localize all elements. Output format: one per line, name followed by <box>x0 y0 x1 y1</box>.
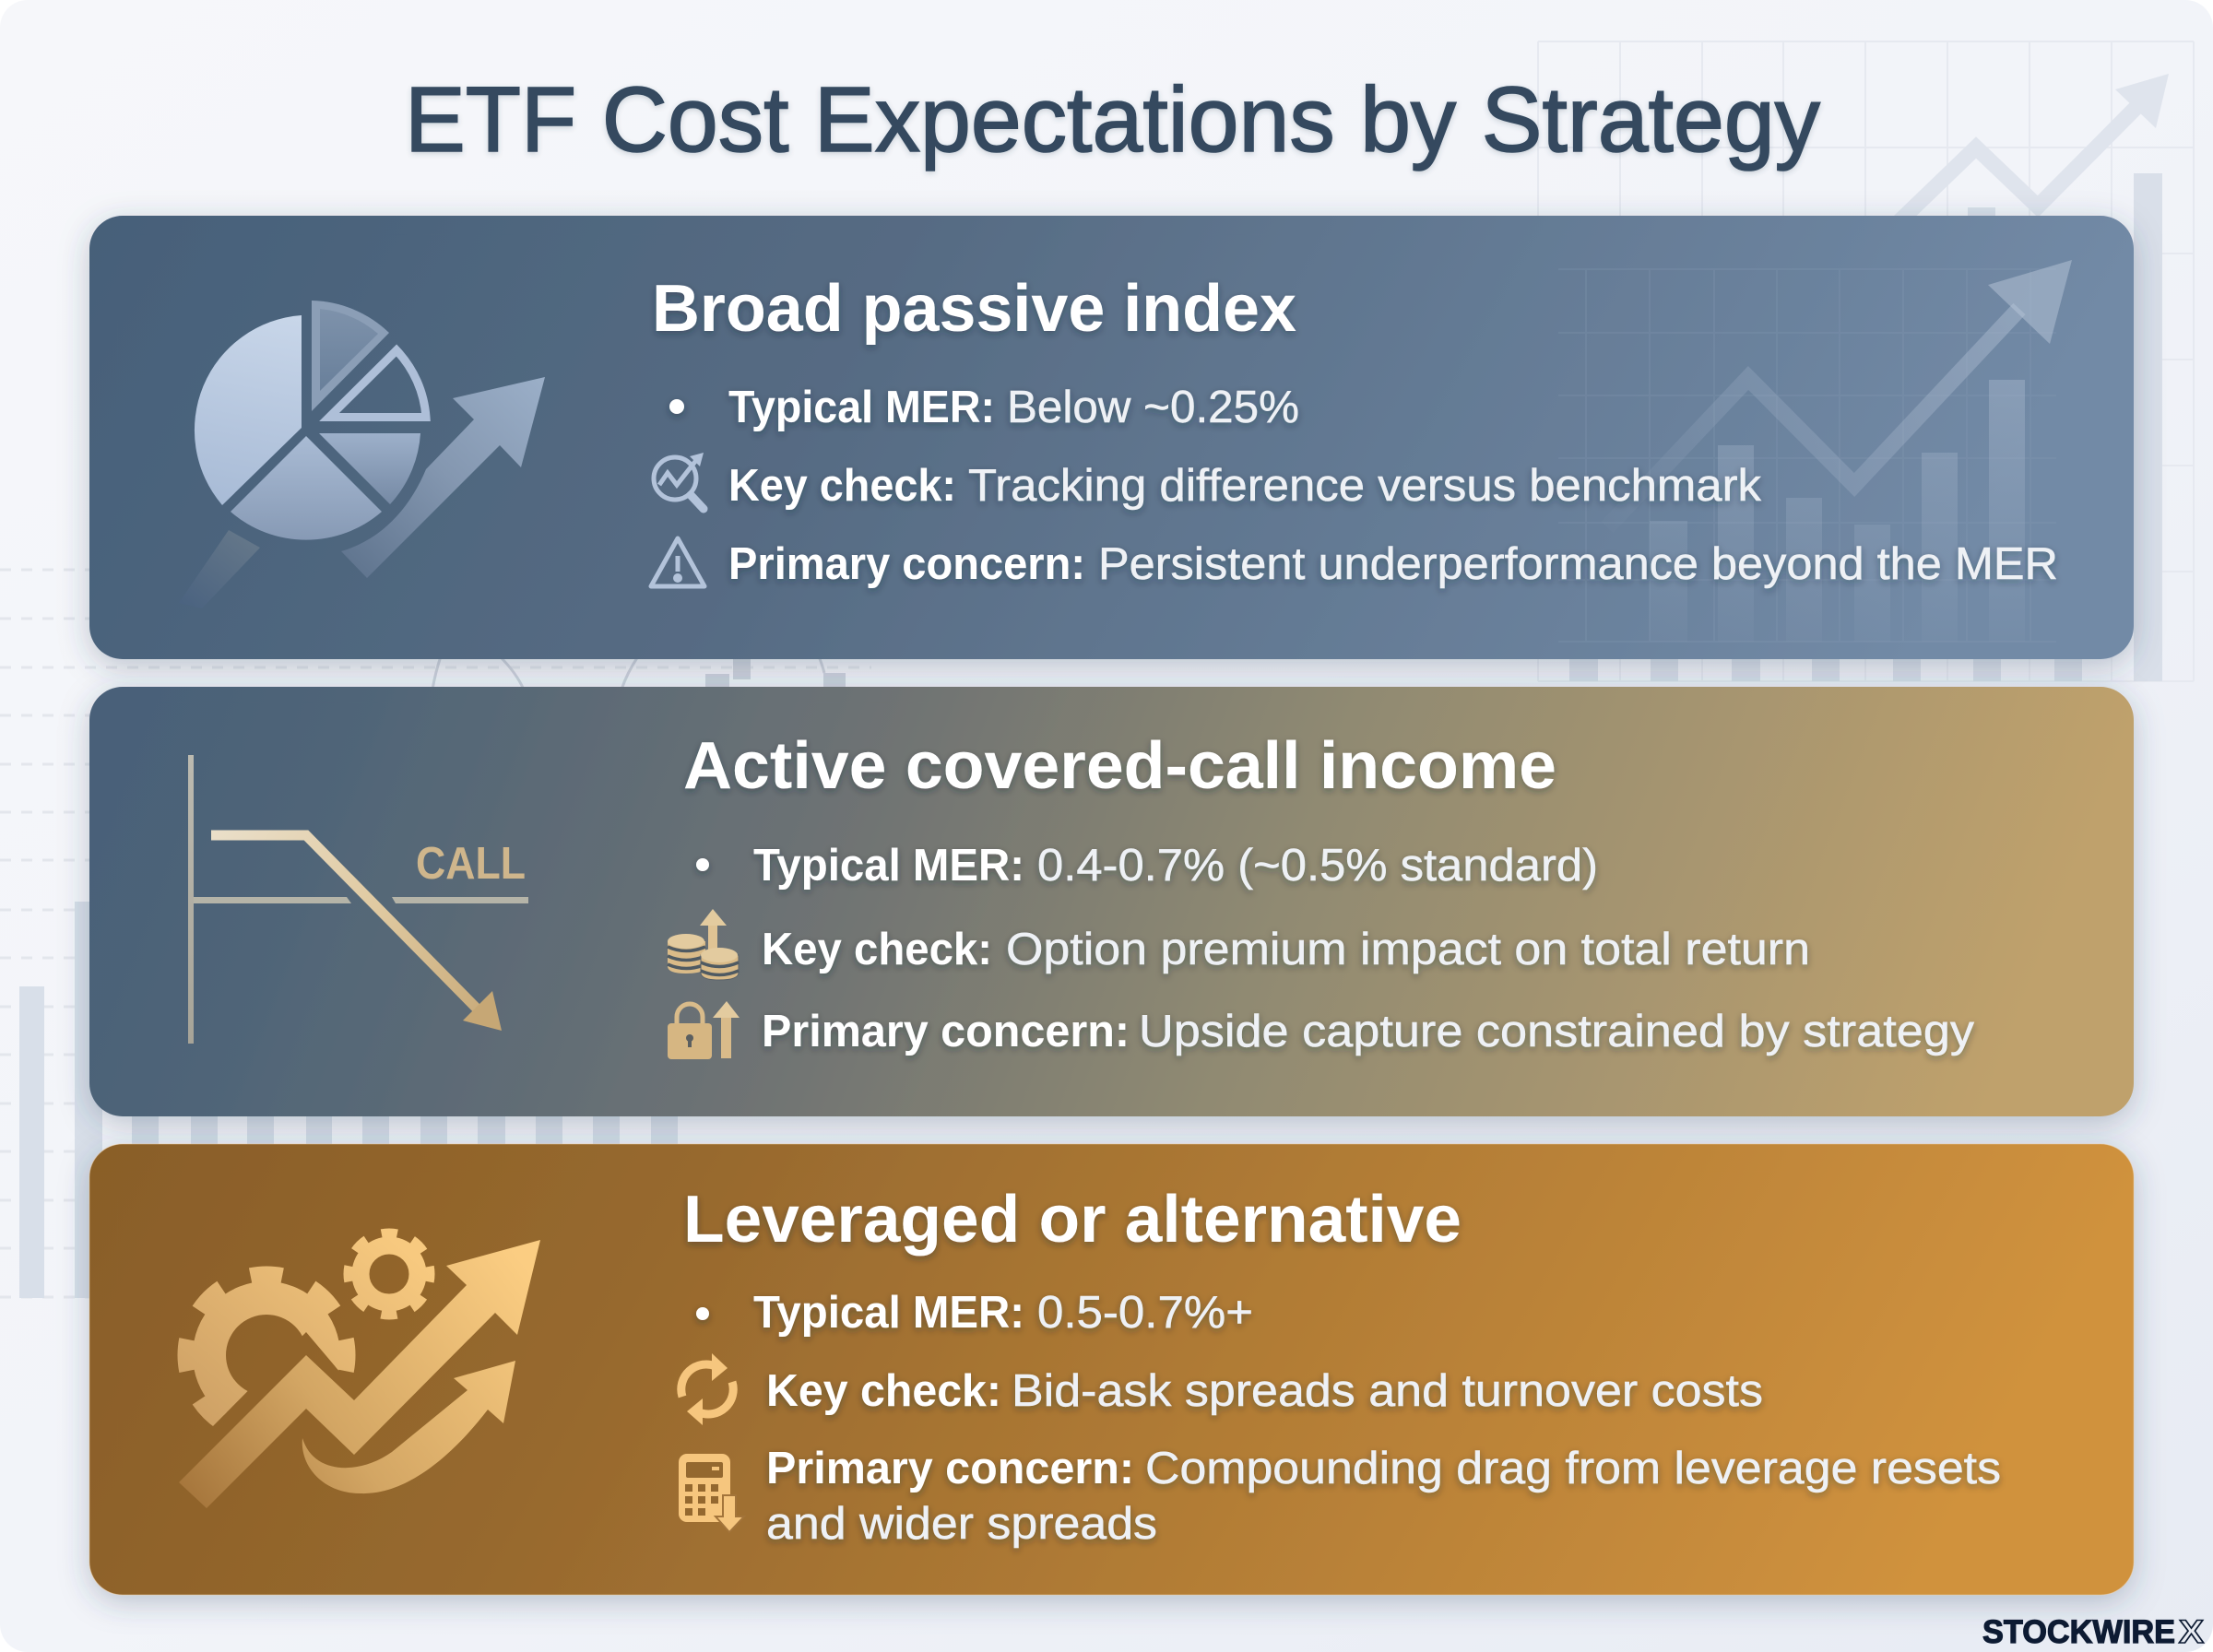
icon: covered call payoff diagram <box>188 755 528 1044</box>
primary concern text: Persistent underperformance beyond the MER <box>1098 539 2058 589</box>
brand logo: X <box>2179 1614 2205 1650</box>
icon: covered call payoff diagram: CALL <box>416 839 526 889</box>
icon: warning triangle <box>651 538 704 586</box>
key check text: Key check: <box>766 1366 1001 1416</box>
key check text: Tracking difference versus benchmark <box>968 461 1762 511</box>
background bars left <box>19 902 678 1298</box>
primary concern text: Primary concern: <box>762 1007 1130 1056</box>
key check text: Key check: <box>728 461 956 511</box>
bullet: typical MER <box>669 383 1299 432</box>
title: ETF Cost Expectations by Strategy <box>405 68 1820 171</box>
bullet: typical MER: Typical MER: <box>728 383 995 432</box>
primary concern text <box>762 1007 1975 1056</box>
primary concern text: Upside capture constrained by strategy <box>1139 1007 1975 1056</box>
background dashed guide lines <box>0 570 871 1297</box>
icon: magnifier with trend <box>654 453 704 509</box>
icon: coins with up arrow <box>668 909 739 980</box>
bullet: typical MER <box>696 841 1598 891</box>
panel: active covered-call income <box>89 687 2134 1116</box>
heading: Active covered-call income <box>683 729 1556 803</box>
key check text: Key check: <box>762 925 992 974</box>
icon: calculator with down arrow <box>679 1454 744 1532</box>
panel: broad passive index <box>89 216 2134 659</box>
background grid and growth chart <box>1538 41 2194 681</box>
panel chart watermark <box>1558 260 2072 642</box>
primary concern text: Primary concern: <box>766 1444 1134 1493</box>
bullet: typical MER <box>696 1288 1253 1338</box>
key check text: Bid-ask spreads and turnover costs <box>1012 1366 1763 1416</box>
heading: Broad passive index <box>652 272 1296 346</box>
heading: Leveraged or alternative <box>683 1183 1462 1257</box>
primary concern text: and wider spreads <box>766 1499 1157 1549</box>
icon: cycle arrows <box>681 1353 733 1425</box>
icon: pie chart with rising arrow <box>179 301 545 608</box>
background circles and small bars <box>432 656 846 690</box>
panel: leveraged or alternative <box>89 1144 2134 1595</box>
primary concern text: Compounding drag from leverage resets <box>1145 1444 2001 1493</box>
primary concern text <box>766 1444 2001 1549</box>
bullet: typical MER: 0.4-0.7% (~0.5% standard) <box>1037 841 1598 891</box>
primary concern text: Primary concern: <box>728 539 1085 589</box>
icon: lock with up arrow <box>668 1001 740 1059</box>
icon: gears with rising arrows <box>179 1233 540 1508</box>
brand logo: STOCKWIRE <box>1982 1614 2175 1650</box>
bullet: typical MER: Typical MER: <box>753 841 1024 891</box>
bullet: typical MER: Below ~0.25% <box>1007 383 1299 432</box>
bullet: typical MER: 0.5-0.7%+ <box>1037 1288 1253 1338</box>
key check text: Option premium impact on total return <box>1006 925 1810 974</box>
bullet: typical MER: Typical MER: <box>753 1288 1024 1338</box>
